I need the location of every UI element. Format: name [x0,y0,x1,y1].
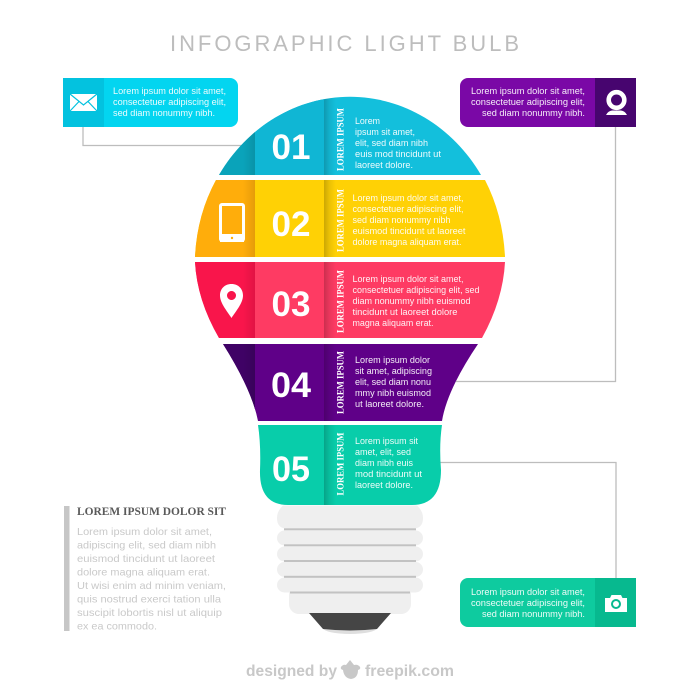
vertical label: LOREM IPSUM [336,432,346,496]
segment text: laoreet dolore. [355,160,413,171]
callout text [471,587,585,620]
segment text [355,436,422,491]
block body: ex ea commodo. [77,622,157,632]
segment text: Lorem [355,116,380,127]
callout: camera [460,578,636,627]
footer credit [246,660,454,680]
segment text [352,274,480,329]
connector: webcam callout to segment 04 [456,127,616,382]
callout text: consectetuer adipiscing elit, [471,97,585,108]
number 01: 01 [272,127,310,167]
block body: dolore magna aliquam erat. [77,568,210,578]
callout text: Lorem ipsum dolor sit amet, [471,86,585,97]
callout text: sed diam nonummy nibh. [482,609,585,620]
segment text: Lorem ipsum dolor sit amet, [352,274,464,285]
callout text: sed diam nonummy nibh. [482,108,585,119]
segment text: Lorem ipsum sit [355,436,418,447]
callout text: Lorem ipsum dolor sit amet, [113,86,226,97]
icon: map pin [220,284,243,318]
segment text: Lorem ipsum dolor sit amet, [352,193,464,204]
number 02: 02 [272,204,310,244]
segment text: elit, sed diam nibh [355,138,428,149]
number 04: 04 [271,365,311,405]
segment text: sit amet, adipiscing [355,366,432,377]
segment text: consectetuer adipiscing elit, [352,204,464,215]
callout text: Lorem ipsum dolor sit amet, [471,587,585,598]
callout: webcam [460,78,636,127]
icon: freepik logo [341,660,360,679]
bulb base: screw threads [277,506,423,634]
icon: envelope [70,94,97,111]
icon: webcam [606,92,627,115]
segment text: diam nibh euis [355,458,413,469]
segment text [355,355,432,410]
connector: mail callout to segment 01 [83,127,250,146]
callout text [113,86,226,119]
block body: Ut wisi enim ad minim veniam, [77,581,226,592]
block body: quis nostrud exerci tation ulla [77,594,221,606]
segment text: elit, sed diam nonu [355,377,431,388]
block heading: LOREM IPSUM DOLOR SIT [77,506,226,518]
callout text: sed diam nonummy nibh. [113,108,215,119]
connector: camera callout to segment 05 [440,462,616,578]
segment text: dolore magna aliquam erat. [352,237,462,248]
segment text: consectetuer adipiscing elit, sed [352,285,480,296]
segment text: sed diam nonummy nibh [352,215,450,226]
segment text: euismod tincidunt ut laoreet [352,226,466,237]
block body: Lorem ipsum dolor sit amet, [77,527,212,538]
number 05: 05 [272,449,310,489]
segment text: ut laoreet dolore. [355,399,424,410]
callout text: consectetuer adipiscing elit, [113,97,226,108]
segment text: ipsum sit amet, [355,127,415,138]
segment text: mod tincidunt ut [355,469,422,480]
callout: mail [63,78,238,127]
vertical label: LOREM IPSUM [336,189,346,252]
footer credit: freepik.com [365,663,454,680]
segment text [352,193,466,248]
segment text: tincidunt ut laoreet dolore [352,307,458,318]
segment text: Lorem ipsum dolor [355,355,431,366]
title: INFOGRAPHIC LIGHT BULB [170,31,519,56]
segment text [355,116,441,171]
vertical label: LOREM IPSUM [336,108,346,171]
icon: camera [605,595,627,612]
bulb segment 03 [195,262,505,338]
segment text: magna aliquam erat. [352,318,434,329]
bulb segment 04 [223,344,478,421]
segment text: mmy nibh euismod [355,388,431,399]
icon: tablet [220,204,244,242]
bulb segment 01 [219,96,481,175]
bulb segment 02 [195,180,505,257]
segment text: laoreet dolore. [355,480,413,491]
callout text: consectetuer adipiscing elit, [471,598,585,609]
segment text: euis mod tincidunt ut [355,149,441,160]
footer credit: designed by [246,663,337,680]
block body: suscipit lobortis nisl ut aliquip [77,608,222,619]
vertical label: LOREM IPSUM [336,351,346,414]
bulb contact tip [309,613,391,634]
block body: adipiscing elit, sed diam nibh [77,540,216,552]
block body: euismod tincidunt ut laoreet [77,554,215,565]
bulb segment 05 [258,425,442,505]
segment text: diam nonummy nibh euismod [352,296,470,307]
segment text: amet, elit, sed [355,447,411,458]
number 03: 03 [272,284,310,324]
vertical label: LOREM IPSUM [336,270,346,333]
block body [77,527,226,632]
callout text [471,86,585,119]
text block: lower left [64,506,226,632]
